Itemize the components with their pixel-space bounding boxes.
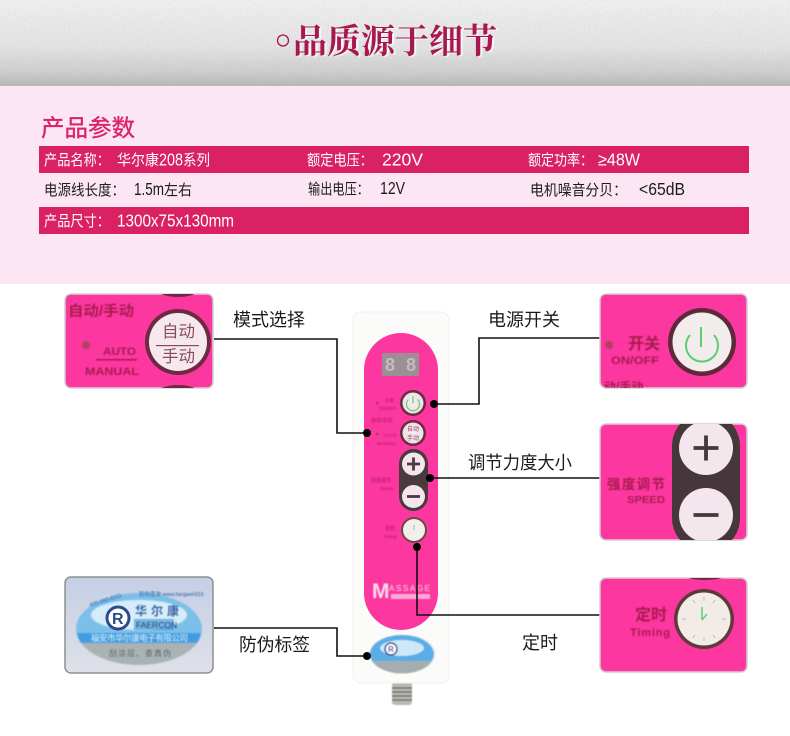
panel: timing close-up (600, 568, 747, 672)
spec row 2: 电机噪音分贝： (530, 182, 627, 199)
neighbouring button edges (162, 294, 194, 388)
panel: power close-up (600, 294, 747, 394)
auto manual label: AUTO (384, 433, 397, 438)
panel: anti-counterfeit sticker close-up (65, 577, 213, 673)
speed text: SPEED (627, 495, 665, 506)
brand mark (372, 580, 430, 603)
auto manual button: 手动 (407, 434, 419, 442)
timing text: Timing (630, 627, 670, 639)
large power button (668, 308, 736, 376)
spec row 2: 输出电压： (308, 181, 369, 198)
timing label: 定时 (385, 525, 395, 532)
auto manual text (68, 302, 139, 378)
spec row 2: 1.5m (134, 179, 164, 199)
power label: 开关 (385, 397, 394, 404)
title: 品质源于细节 (293, 22, 497, 61)
spec row 1: 额定电压： (307, 152, 373, 169)
line: strength (430, 477, 600, 479)
auto manual button: 自动 (407, 425, 419, 433)
spec row 1: 额定功率： (528, 152, 593, 169)
sticker scratch text: 刮涂层、查真伪 (109, 648, 171, 658)
heading: product parameters: 产品参数 (41, 115, 135, 141)
speed label: 强度调节 (371, 477, 391, 484)
spec row 3: 1300x75x130mm (117, 210, 234, 230)
power text (604, 335, 660, 388)
spec row 1: 208 (159, 150, 183, 170)
pink face (364, 333, 438, 630)
title: 品质源于细节 (295, 23, 499, 62)
LED display: 88 (385, 355, 416, 375)
device body (353, 312, 449, 683)
speed label (371, 477, 394, 491)
sticker brand name: 防伪查询 www.fangwei315 (139, 590, 204, 598)
caption: anti-counterfeit label: 防伪标签 (239, 635, 310, 655)
spec row 2: <65dB (639, 179, 685, 199)
panel: speed close-up (599, 423, 748, 541)
sticker brand name: 华尔康 (135, 603, 179, 618)
connector stub (392, 682, 412, 705)
brand mark: M (372, 580, 390, 603)
sticker brand name (89, 590, 204, 630)
caption: adjust strength: 调节力度大小 (468, 453, 572, 473)
spec row 2: 左右 (164, 182, 192, 199)
spec row 1: ≥48W (598, 150, 640, 170)
spec row 1: 220V (382, 150, 423, 170)
power text: ON/OFF (611, 355, 659, 367)
caption: timing: 定时 (522, 633, 558, 653)
connector dots (363, 400, 438, 660)
spec row 3 (39, 207, 749, 234)
auto manual label (371, 417, 397, 446)
power button (400, 390, 426, 416)
spec row 1 (39, 146, 749, 173)
speed pill and buttons (399, 449, 428, 511)
spec row 2: 12V (380, 178, 405, 198)
sticker logo (107, 607, 129, 629)
speed text: 强度调节 (607, 476, 665, 492)
small anti-counterfeit sticker: R (388, 645, 394, 654)
line: mode selection (214, 339, 367, 433)
speed label: SPEED (380, 486, 394, 491)
auto manual text: 自动/手动 (68, 302, 134, 320)
brand mark: ASSAGE (389, 584, 430, 593)
small anti-counterfeit sticker (370, 635, 435, 673)
auto manual button (400, 420, 426, 446)
timing text: 定时 (635, 605, 667, 624)
spec row 2: 电源线长度： (44, 182, 125, 199)
caption: power switch: 电源开关 (488, 310, 560, 330)
power text: 动/手动 (604, 379, 643, 394)
sticker company line: 福安市华尔康电子有限公司 (91, 633, 188, 643)
speed text (607, 476, 665, 506)
timing label: Timing (383, 534, 397, 539)
large auto manual button (145, 309, 211, 375)
power text: 开关 (628, 334, 660, 353)
auto manual label: MANUAL (377, 441, 396, 446)
large auto manual button: 自动 (162, 322, 195, 341)
line: timing (417, 547, 600, 615)
header band (0, 0, 790, 86)
auto manual text: AUTO (103, 346, 136, 358)
panel: auto manual close-up (64, 293, 214, 389)
sticker brand name: 400-660-6311 (89, 593, 123, 609)
power label (376, 397, 396, 411)
connector lines (214, 338, 600, 656)
timing text (630, 605, 670, 639)
sticker oval (76, 593, 202, 665)
spec row 1: 产品名称： (44, 152, 110, 169)
spec row 1: 系列 (183, 152, 210, 169)
spec row 2 (44, 178, 685, 199)
parameters panel background (0, 86, 790, 284)
caption: mode selection: 模式选择 (233, 310, 305, 330)
large auto manual button: 手动 (162, 347, 195, 366)
auto manual label: 自动/手动 (371, 417, 392, 424)
line: label (214, 628, 367, 656)
clock dial (674, 589, 734, 649)
power label: ON/OFF (379, 406, 396, 411)
neighbouring button edge (688, 578, 722, 580)
spec row 3: 产品尺寸： (44, 213, 110, 230)
large plus minus buttons (672, 424, 740, 540)
sticker logo: R (112, 611, 124, 628)
remote control device (353, 312, 449, 705)
timing dial (401, 517, 427, 543)
auto manual text: MANUAL (85, 366, 139, 378)
line: power switch (434, 338, 600, 404)
sticker brand name: FAERCON (136, 620, 177, 630)
timing label (383, 525, 397, 539)
spec row 1: 华尔康 (117, 152, 159, 169)
